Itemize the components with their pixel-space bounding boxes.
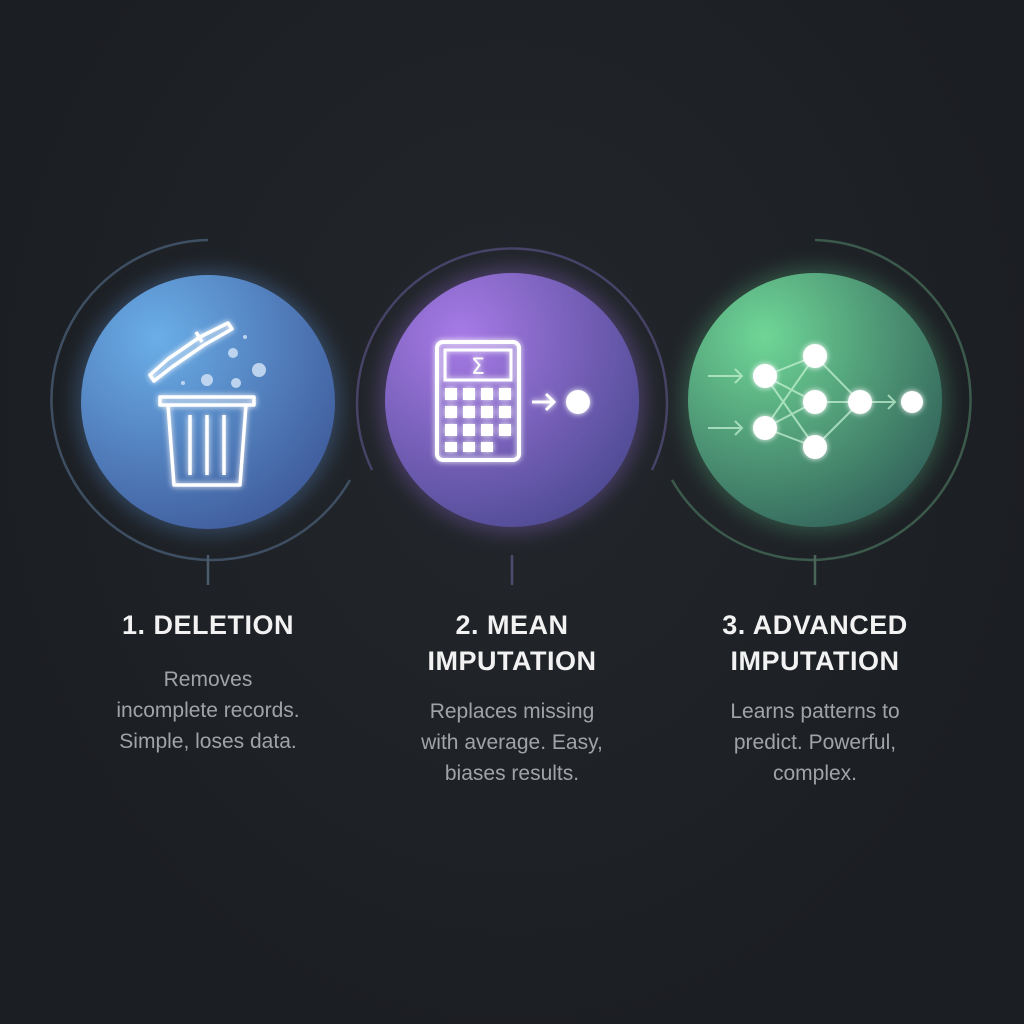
body 3: predict. Powerful,: [734, 731, 896, 754]
rings: [51, 240, 971, 585]
body 3: [730, 700, 900, 785]
diagram: [50, 238, 972, 585]
body 2: biases results.: [445, 762, 579, 785]
body 2: [421, 700, 603, 785]
circle 2 mean: Σ: [471, 355, 485, 380]
body 3: complex.: [773, 762, 857, 785]
body 1: Simple, loses data.: [119, 730, 297, 753]
body 3: Learns patterns to: [730, 700, 900, 723]
body 1: incomplete records.: [116, 699, 300, 722]
circle 1 deletion: [76, 270, 340, 534]
circle 3 advanced: [683, 268, 947, 532]
circle 2 mean: [380, 268, 644, 532]
title 3: [722, 610, 908, 676]
title 2: 2. MEAN: [455, 610, 569, 640]
body 1: Removes: [164, 668, 252, 691]
body 2: with average. Easy,: [421, 731, 603, 754]
title 1: 1. DELETION: [122, 610, 294, 640]
title 2: IMPUTATION: [428, 646, 596, 676]
body 2: Replaces missing: [430, 700, 594, 723]
title 2: [428, 610, 596, 676]
body 1: [116, 668, 300, 753]
title 3: IMPUTATION: [730, 646, 899, 676]
title 3: 3. ADVANCED: [722, 610, 908, 640]
